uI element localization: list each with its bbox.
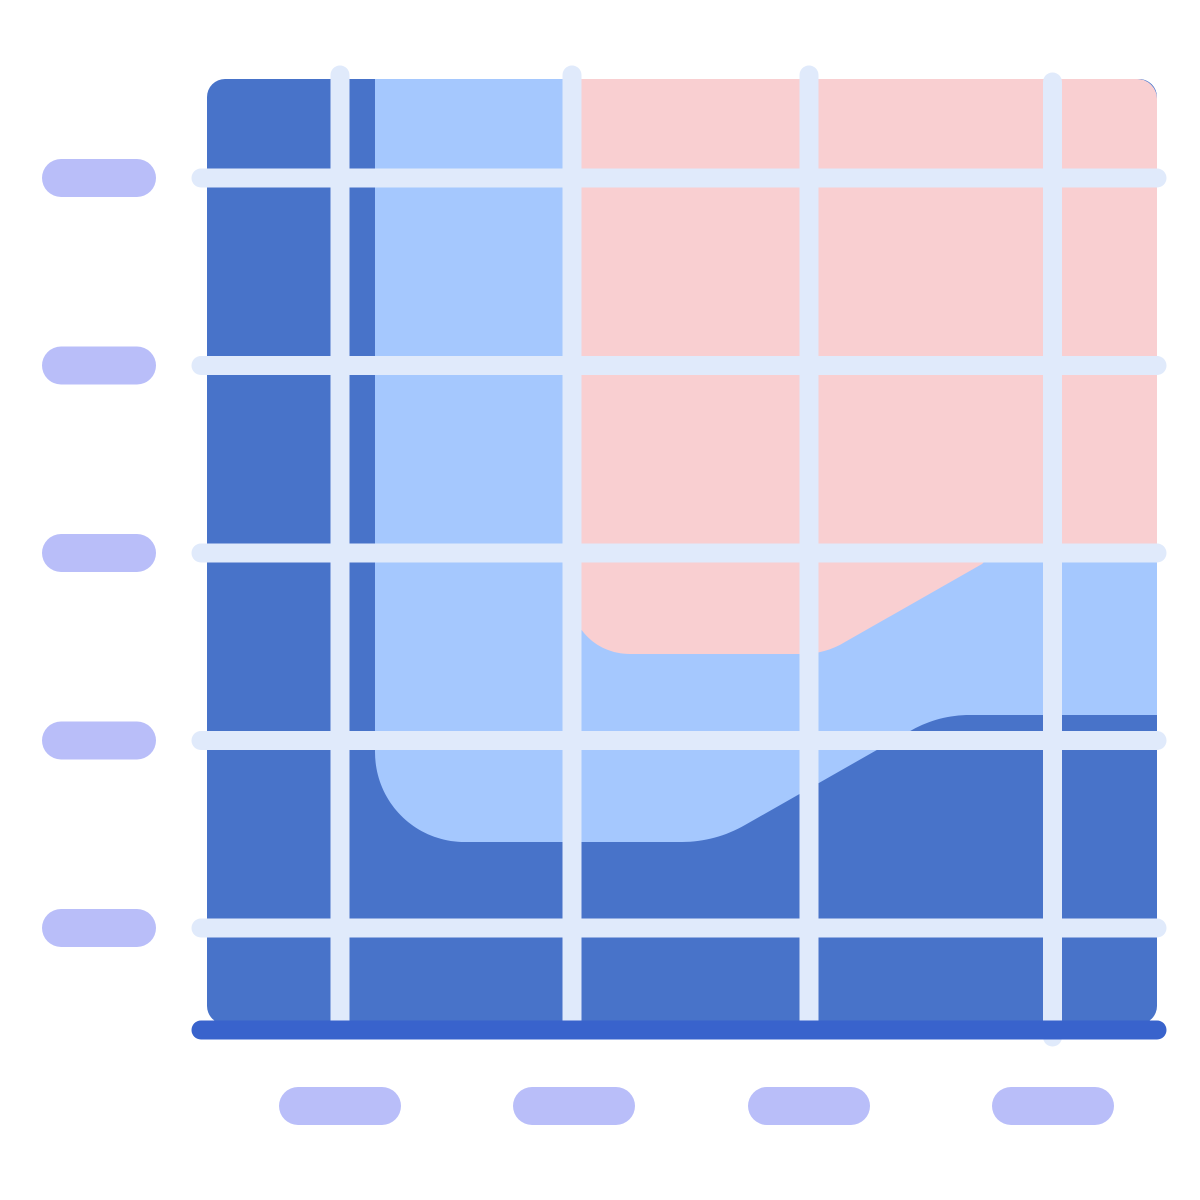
x axis label placeholders (279, 1087, 1114, 1125)
chart background: dark blue area (207, 79, 1157, 1024)
light blue area (375, 79, 1157, 842)
vertical grid lines (340, 75, 1052, 1037)
pink area (572, 79, 1157, 654)
x axis line (201, 1020, 1157, 1040)
horizontal grid lines (201, 178, 1157, 928)
y axis label placeholders (42, 159, 156, 947)
